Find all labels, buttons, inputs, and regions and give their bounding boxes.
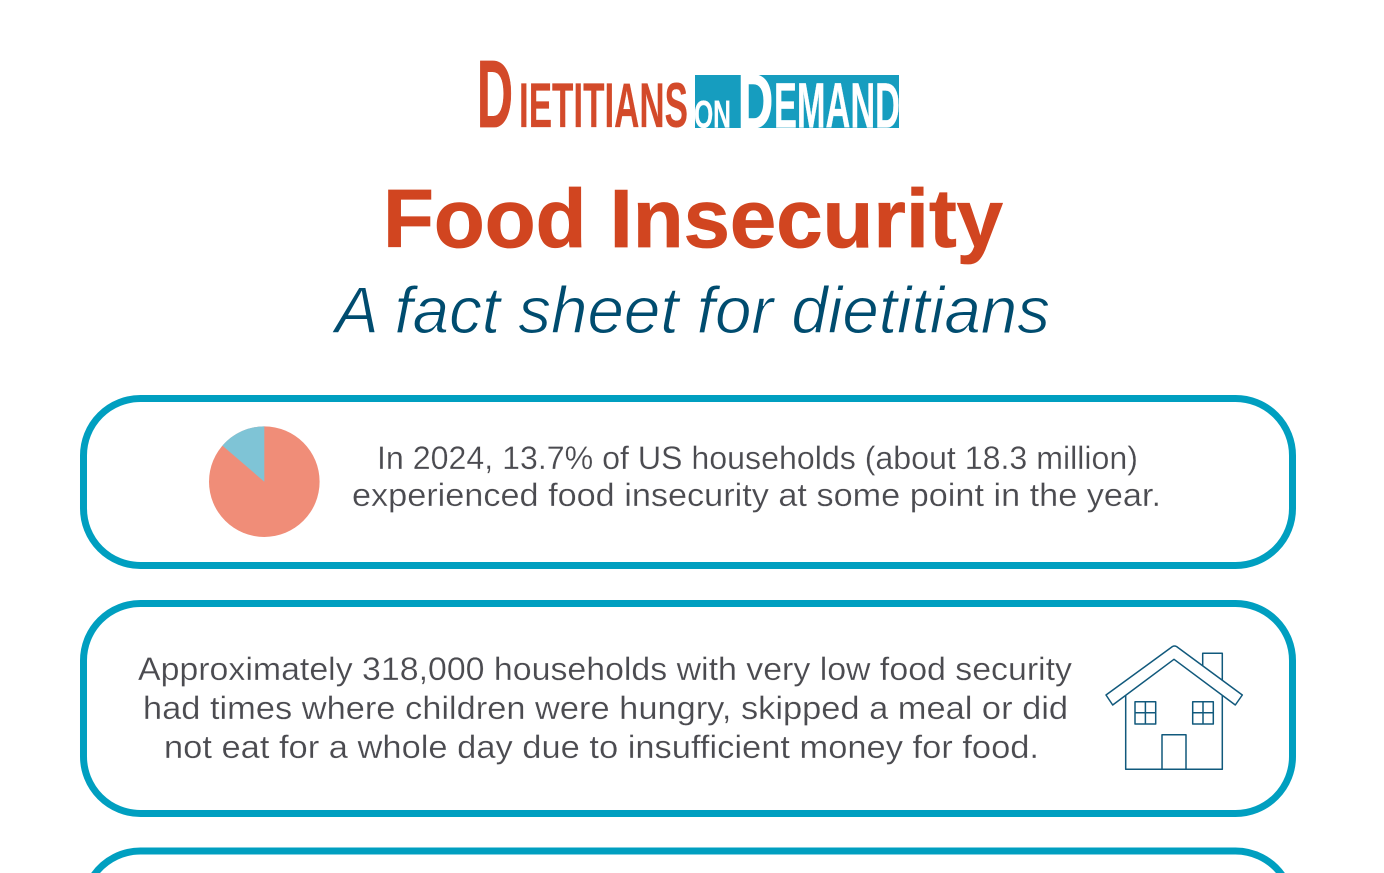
logo banner: on Demand: EMAND xyxy=(774,70,900,142)
panel text: Approximately 318,000 households with very low food security xyxy=(138,651,1072,687)
panel text xyxy=(352,440,1161,513)
logo banner: on Demand: D xyxy=(738,60,773,144)
logo word: Dietitians: D xyxy=(477,41,513,148)
panel text: experienced food insecurity at some point in the year. xyxy=(352,477,1161,513)
panel: third fact card (cropped at page bottom) xyxy=(91,847,1285,873)
panel outline xyxy=(84,604,1292,814)
panel text: not eat for a whole day due to insufficient money for food. xyxy=(164,729,1039,765)
panel text: had times where children were hungry, skipped a meal or did xyxy=(143,690,1068,726)
logo banner: on Demand xyxy=(694,60,900,144)
panel text: In 2024, 13.7% of US households (about 18.3 million) xyxy=(377,440,1138,476)
subtitle: A fact sheet for dietitians xyxy=(331,273,1050,347)
title: Food Insecurity xyxy=(383,172,1003,265)
icon: house xyxy=(1106,646,1242,769)
panel: household food insecurity xyxy=(84,398,1292,566)
logo word: Dietitians: IETITIANS xyxy=(519,71,688,141)
panel outline xyxy=(84,398,1292,566)
panel: very low food security xyxy=(84,604,1292,814)
logo word: Dietitians xyxy=(477,41,688,148)
pie chart: 13.7% of households xyxy=(209,426,320,537)
logo banner: on Demand: ON xyxy=(694,94,731,136)
logo: Dietitians on Demand xyxy=(477,41,900,148)
panel text xyxy=(138,651,1072,765)
